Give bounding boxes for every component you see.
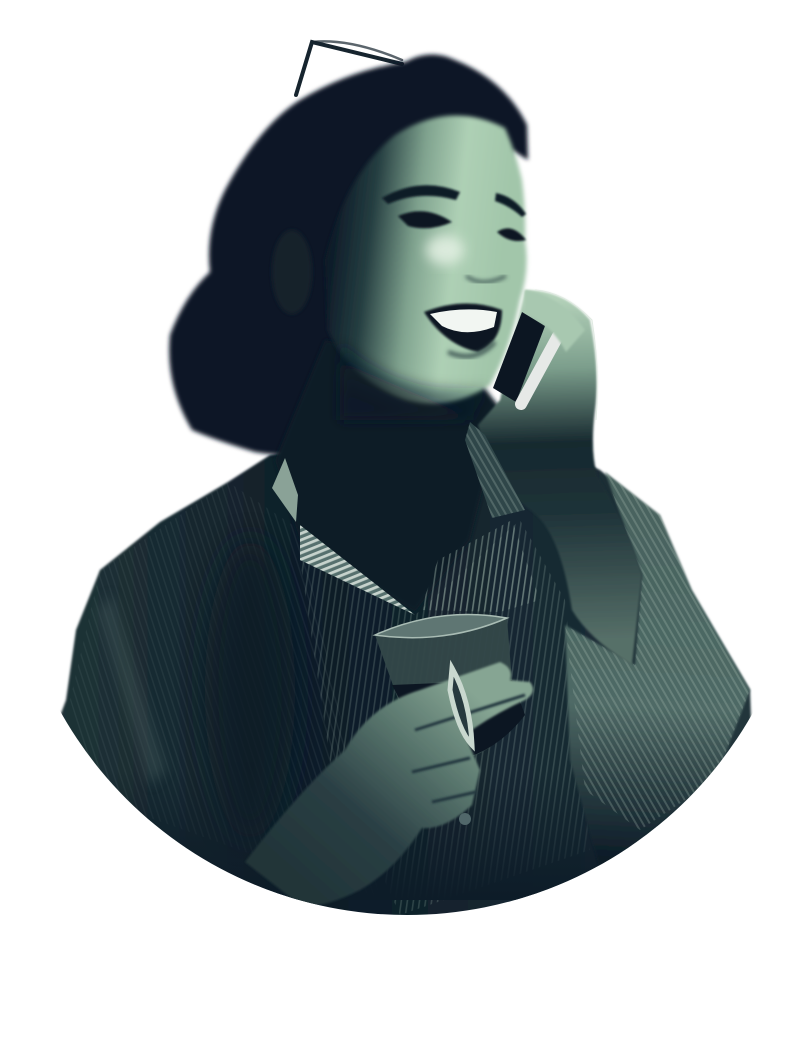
hand outline <box>535 290 597 420</box>
glasses on head <box>296 41 402 95</box>
shirt body <box>60 453 753 915</box>
collar <box>272 422 540 615</box>
right eye <box>497 228 526 241</box>
nose <box>466 276 506 282</box>
phone edge <box>521 336 558 404</box>
phone hand and forearm <box>478 290 642 665</box>
glass cup <box>375 614 525 762</box>
right sleeve <box>565 472 750 870</box>
cheek highlight <box>426 235 464 265</box>
jaw shadow <box>340 340 490 420</box>
left eye <box>398 211 452 228</box>
neck <box>275 340 510 612</box>
left eyebrow <box>382 185 460 204</box>
left sleeve highlight <box>98 595 165 785</box>
finger creases <box>412 695 525 802</box>
circular photo crop <box>60 453 753 915</box>
shirt stripes centre <box>300 520 590 915</box>
duotone portrait illustration <box>60 40 753 915</box>
hand holding cup <box>245 662 533 906</box>
fingers over phone <box>525 290 585 352</box>
ear <box>272 230 312 314</box>
shirt button <box>459 813 471 825</box>
face <box>272 116 527 420</box>
phone <box>493 312 545 402</box>
shirt shadows <box>205 540 295 840</box>
glass handle ring <box>450 668 472 745</box>
mouth <box>424 303 502 356</box>
hair <box>169 54 528 456</box>
right eyebrow <box>495 193 526 217</box>
shirt left stripes <box>70 484 346 812</box>
